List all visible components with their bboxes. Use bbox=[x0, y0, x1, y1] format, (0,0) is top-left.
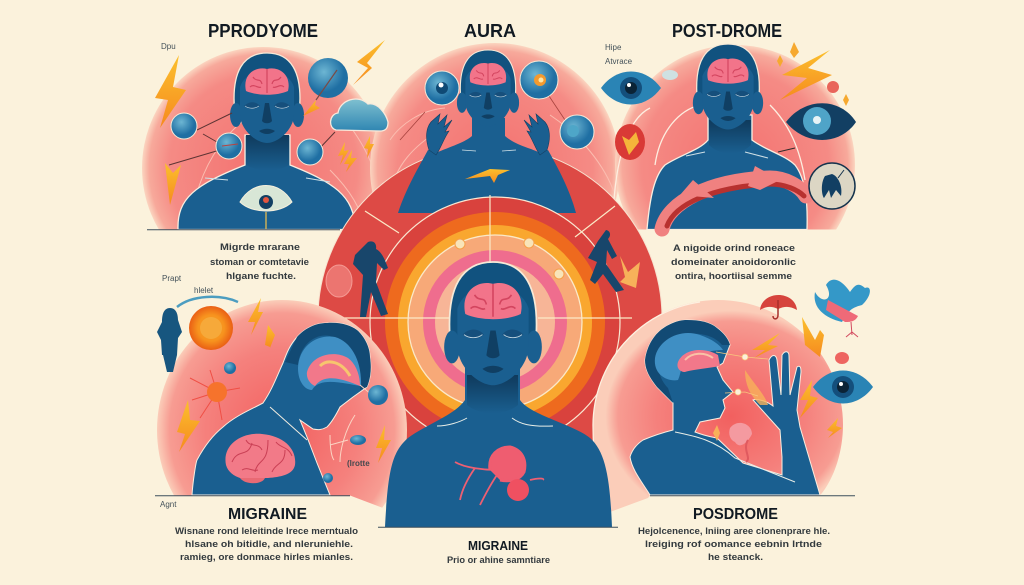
icon: yellow arrow bbox=[303, 100, 320, 116]
icon: connector dots bbox=[716, 352, 768, 396]
text: migraine description: ramieg, ore donmace hirles mianles. bbox=[180, 552, 353, 563]
chart: ring markers bbox=[455, 238, 564, 279]
icon: blue bird bbox=[815, 280, 870, 337]
icon: light streak at hand bbox=[745, 370, 768, 405]
text: prodrome description bbox=[210, 242, 309, 282]
icons: aura discs bbox=[400, 61, 594, 149]
text: postdrome description: A nigoide orind roneace bbox=[673, 243, 795, 254]
icon: post-drome blue eye bbox=[601, 72, 661, 104]
label: hlelet: hlelet bbox=[194, 286, 214, 295]
icon: woman silhouette bbox=[157, 308, 182, 372]
icon: small clouds bbox=[662, 70, 678, 80]
icon: red umbrella bbox=[760, 295, 797, 319]
figure: walking person left bbox=[353, 241, 388, 317]
icon: flower in chest space bbox=[713, 423, 752, 462]
icons: sparkles and red ball bbox=[777, 42, 849, 106]
panel: migraine background bbox=[157, 300, 407, 508]
text: posdrome description: he steanck. bbox=[708, 552, 763, 563]
icon: cloud bbox=[331, 99, 388, 131]
icon: bolt on aura chest bbox=[465, 169, 510, 183]
icon: yellow arrow by walker bbox=[620, 256, 640, 288]
panel: prodrome background bbox=[142, 47, 376, 230]
icons: migraine small discs and lines bbox=[323, 385, 388, 483]
icon: big lightning bolt bbox=[155, 55, 186, 128]
icon: dark eye bbox=[778, 103, 856, 152]
icon: brain on body bbox=[225, 434, 295, 483]
label: small text Hipe Atvrace: Atvrace bbox=[605, 57, 633, 66]
baseline: central bbox=[378, 526, 618, 528]
icon: faint symbol left bbox=[326, 265, 352, 297]
icon: heart and arteries on chest bbox=[455, 447, 543, 505]
icon: clock circle bbox=[809, 163, 855, 209]
figure: aura person bbox=[398, 50, 576, 213]
label: small text Hipe Atvrace bbox=[605, 43, 633, 66]
baseline: prodrome bbox=[147, 229, 340, 231]
figure: central person bbox=[385, 262, 612, 527]
title: prodrome: PPRODYOME bbox=[208, 21, 318, 41]
icons: postdrome bolts bbox=[752, 317, 842, 438]
figure: prodrome person bbox=[178, 53, 355, 230]
panel: aura background bbox=[370, 43, 618, 200]
icon: blue double arrow bbox=[177, 297, 238, 307]
text: posdrome description: lreiging rof oomance eebnin lrtnde bbox=[645, 539, 822, 550]
figure: walking person right bbox=[588, 230, 624, 292]
text: migraine description: Wisnane rond leleitinde lrece merntualo bbox=[175, 526, 358, 537]
icons: small blue discs with connectors bbox=[169, 113, 335, 165]
figure: postdrome person bbox=[630, 320, 820, 495]
title: post-drome: POST-DROME bbox=[672, 21, 782, 41]
text: posdrome description bbox=[638, 526, 830, 563]
label: small text Dpu: Dpu bbox=[161, 42, 176, 51]
title: aura: AURA bbox=[464, 21, 516, 41]
baseline: migraine bbox=[155, 495, 350, 497]
icons: migraine bolts bbox=[177, 298, 391, 463]
icons: small bolts under cloud bbox=[338, 136, 374, 172]
icon: red ball bbox=[835, 352, 849, 364]
figure: migraine person bbox=[192, 323, 371, 495]
text: prodrome description: stoman or comtetavie bbox=[210, 257, 309, 268]
icon: red starburst bbox=[190, 370, 240, 420]
icon: blue sphere bbox=[308, 58, 348, 100]
text: migraine description: hlsane oh bitidle, and nleruniehle. bbox=[185, 539, 353, 550]
heading: migraine centre: MIGRAINE bbox=[468, 539, 528, 553]
icon: lower-left lightning bolt bbox=[165, 163, 181, 205]
text: postdrome description: domeinater anoidoronlic bbox=[671, 257, 796, 268]
figure: post-drome person bbox=[647, 44, 807, 230]
chart: outer red circle bbox=[318, 146, 662, 490]
text: prodrome description: hlgane fuchte. bbox=[226, 271, 296, 282]
icon: blue ball bbox=[224, 362, 236, 374]
text: postdrome description bbox=[671, 243, 796, 282]
text: prodrome description: Migrde mrarane bbox=[220, 242, 300, 253]
icon: orange sun bbox=[189, 306, 233, 350]
icon: heart burst bbox=[615, 124, 645, 160]
icon: eye on chest bbox=[240, 186, 292, 229]
heading: posdrome: POSDROME bbox=[693, 506, 778, 523]
label: Agnt: Agnt bbox=[160, 500, 177, 509]
text: migraine centre note: Prio or ahine samntiare bbox=[447, 555, 550, 566]
chart: concentric rings bbox=[370, 197, 620, 447]
text: migraine description bbox=[175, 526, 358, 563]
text: posdrome description: Hejolcenence, lniing aree clonenprare hle. bbox=[638, 526, 830, 537]
icon: blue eye bbox=[813, 370, 873, 404]
chart: spoke lines bbox=[315, 195, 632, 318]
panel: post-drome bottom background bbox=[593, 300, 843, 512]
baseline: postdrome bbox=[650, 495, 855, 497]
icon: red curved arrow bbox=[662, 166, 806, 229]
heading: migraine left: MIGRAINE bbox=[228, 506, 307, 523]
text: postdrome description: ontira, hoortiisal semme bbox=[675, 271, 792, 282]
label: small text Hipe Atvrace: Hipe bbox=[605, 43, 622, 52]
icon: post-drome bolt bbox=[780, 50, 832, 100]
panel: post-drome background bbox=[614, 45, 855, 230]
label: Prapt: Prapt bbox=[162, 274, 182, 283]
label: inline body notes: (lrotte bbox=[347, 459, 370, 468]
icon: upper lightning bolt bbox=[353, 40, 385, 85]
